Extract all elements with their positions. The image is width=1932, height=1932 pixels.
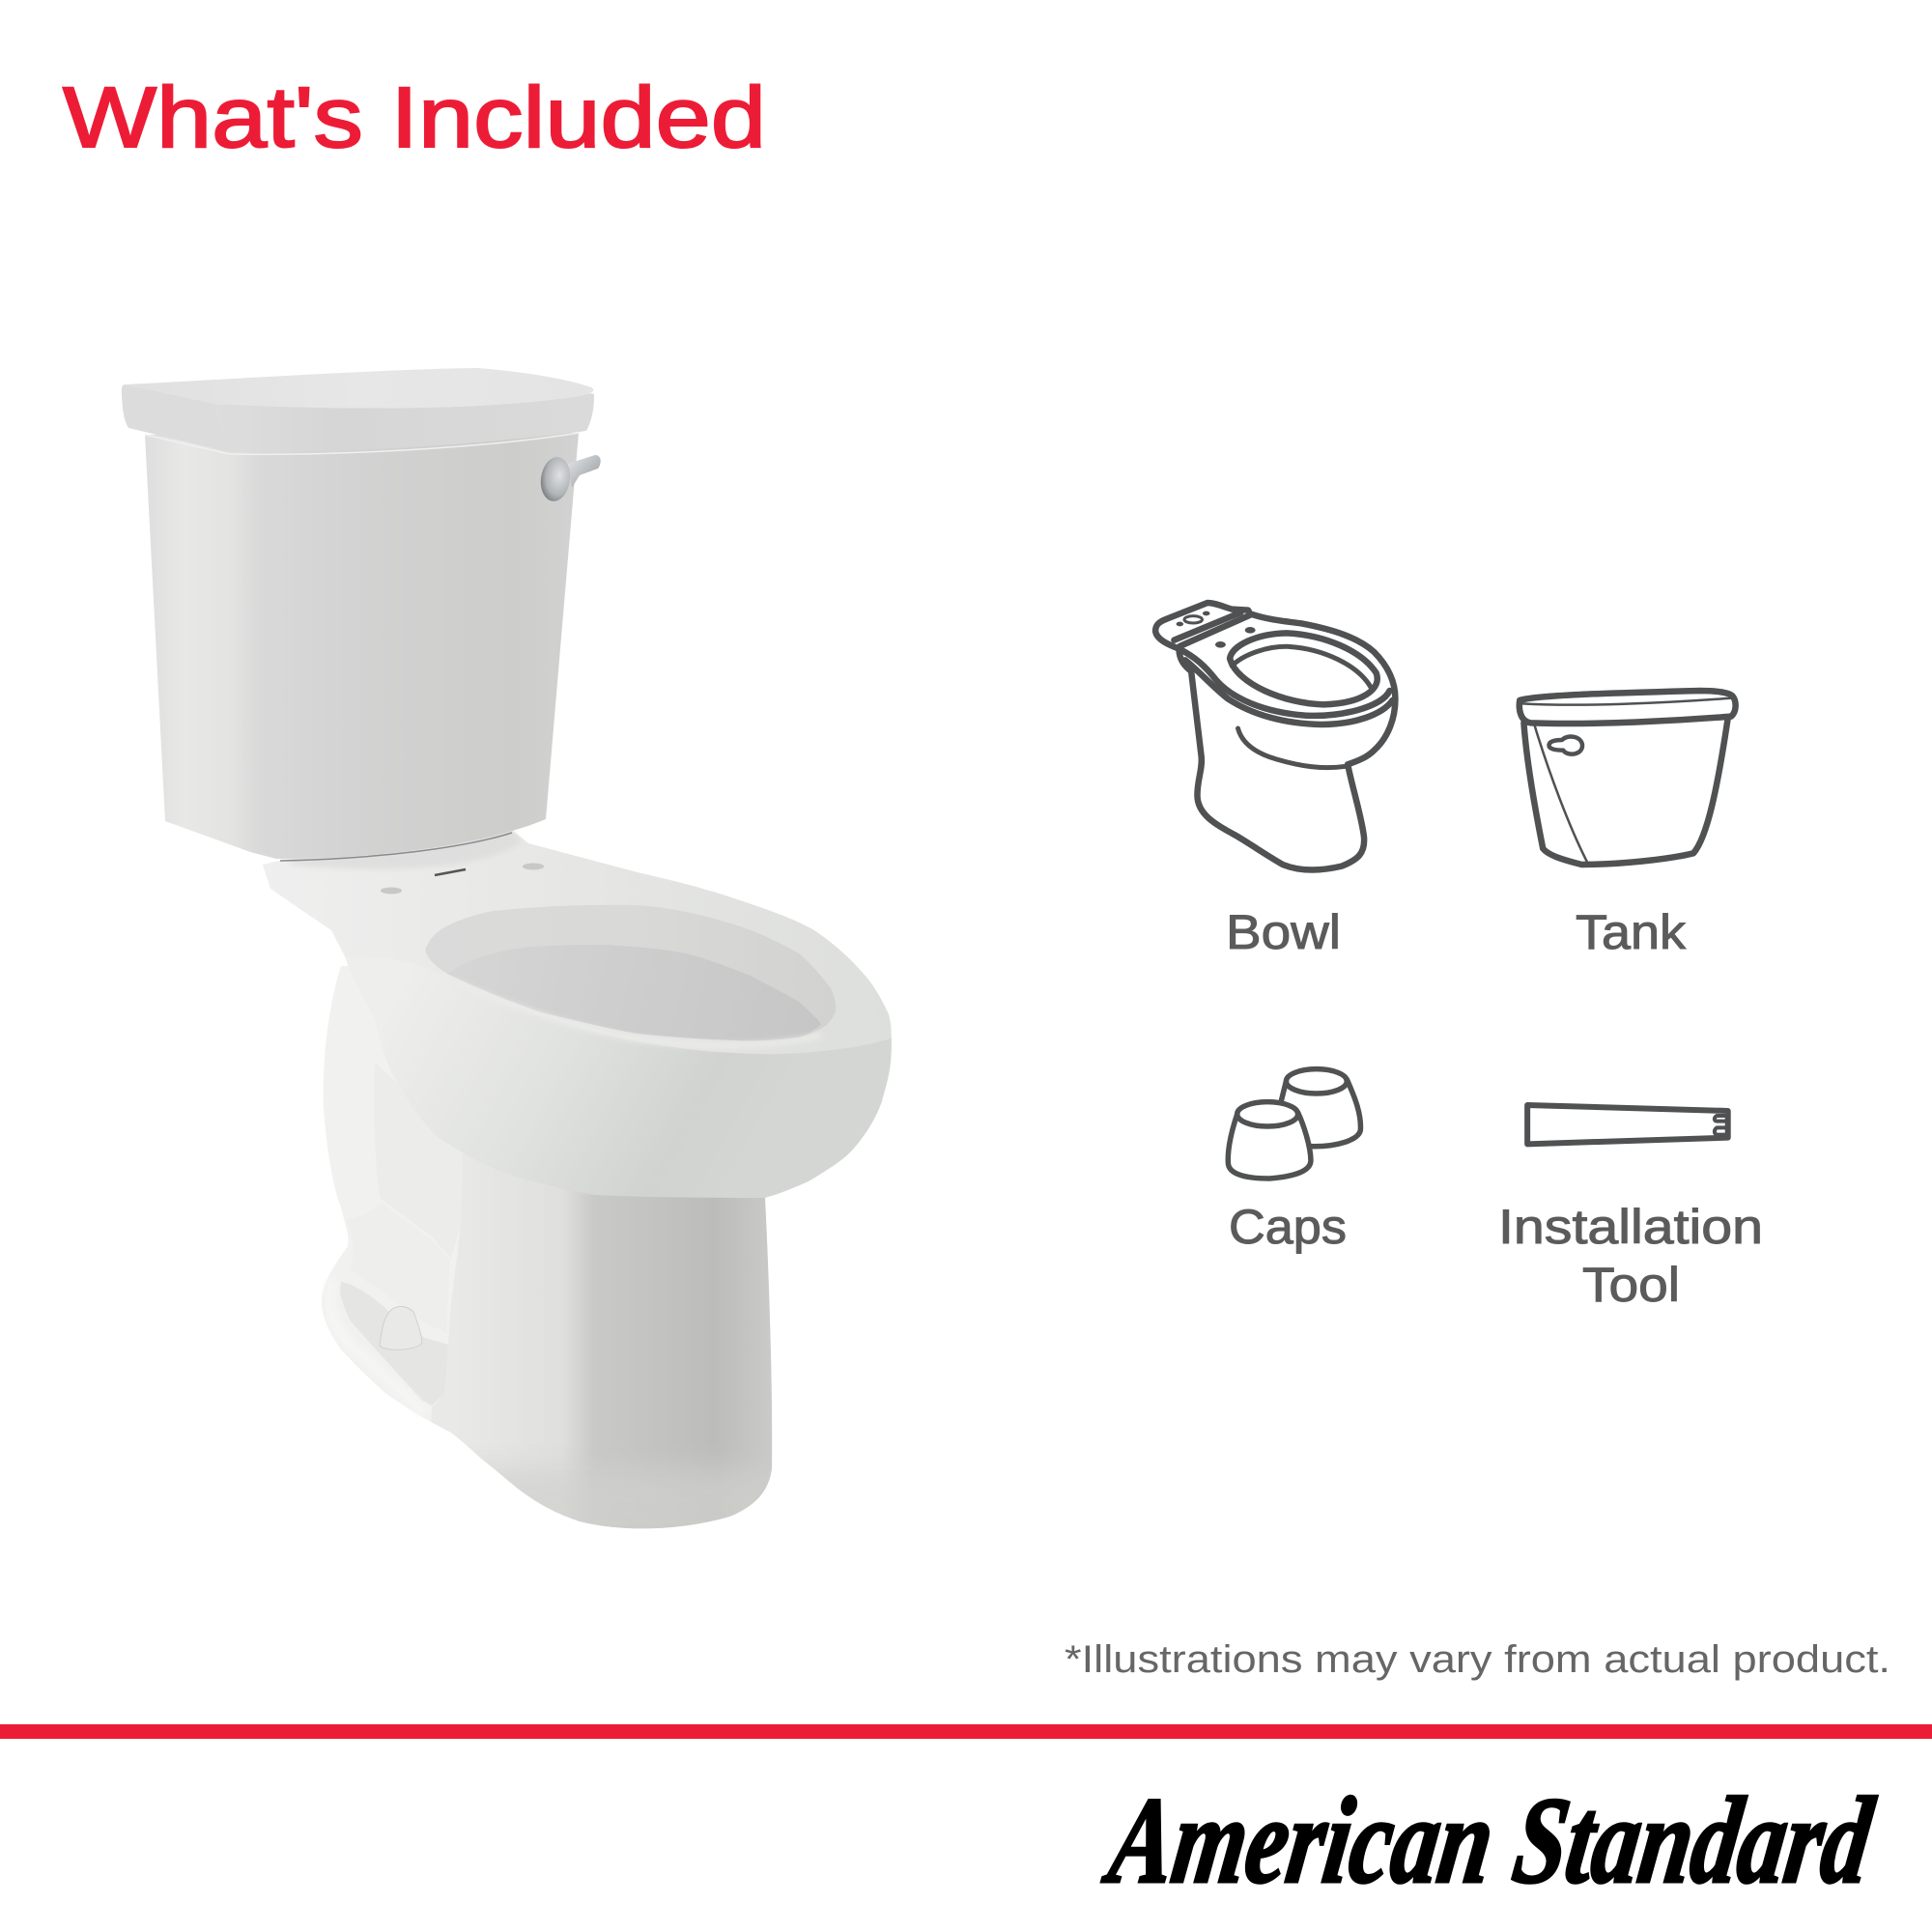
label: Installation Tool: Tool bbox=[1582, 1258, 1680, 1312]
bowl icon details bbox=[1177, 611, 1256, 648]
trapway recess bbox=[374, 1063, 464, 1259]
deck and rim top bbox=[263, 828, 892, 1054]
tank lid side bbox=[122, 384, 229, 452]
deck logo bbox=[435, 869, 466, 875]
icon: tank bbox=[1520, 691, 1736, 865]
lip highlight bbox=[454, 981, 821, 1045]
lid highlight line bbox=[145, 433, 580, 454]
tank body bbox=[145, 433, 579, 859]
label: Bowl: Bowl bbox=[1226, 905, 1341, 959]
label: Tank: Tank bbox=[1576, 905, 1687, 959]
footnote: *Illustrations may vary from actual product. bbox=[1065, 1638, 1890, 1681]
flush handle disc bbox=[538, 455, 573, 503]
label: Caps: Caps bbox=[1229, 1200, 1347, 1254]
icon: bowl bbox=[1155, 603, 1395, 870]
back cap bbox=[1286, 1069, 1347, 1094]
title: What's Included bbox=[63, 69, 766, 165]
front cap bbox=[1237, 1102, 1298, 1126]
tank lid front bbox=[215, 393, 594, 452]
rear ledge bbox=[346, 1203, 450, 1333]
label: Installation Tool bbox=[1498, 1200, 1763, 1312]
flush lever bbox=[568, 455, 601, 488]
pedestal body with shading bbox=[431, 1153, 773, 1528]
toilet bowl bbox=[263, 828, 892, 1546]
floor flange recess bbox=[340, 1282, 448, 1406]
flange rim highlight bbox=[329, 1280, 425, 1412]
tank bottom shadow bbox=[280, 833, 512, 861]
toilet tank bbox=[122, 368, 601, 861]
icon: caps bbox=[1228, 1069, 1360, 1179]
red divider bar bbox=[0, 1724, 1932, 1739]
icon: installation tool bbox=[1527, 1105, 1728, 1144]
photo: two-piece toilet bbox=[122, 368, 892, 1546]
bowl water / inner surface bbox=[447, 945, 821, 1040]
bowl opening bbox=[425, 905, 836, 1040]
label: Installation Tool: Installation bbox=[1498, 1200, 1763, 1254]
deck shadow band under tank bbox=[290, 828, 522, 869]
floor bolt cap bbox=[380, 1306, 422, 1350]
deck bolt holes bbox=[381, 864, 544, 895]
tank lid top bbox=[126, 368, 593, 409]
bowl silhouette base bbox=[322, 966, 772, 1528]
rim body bbox=[263, 865, 892, 1198]
